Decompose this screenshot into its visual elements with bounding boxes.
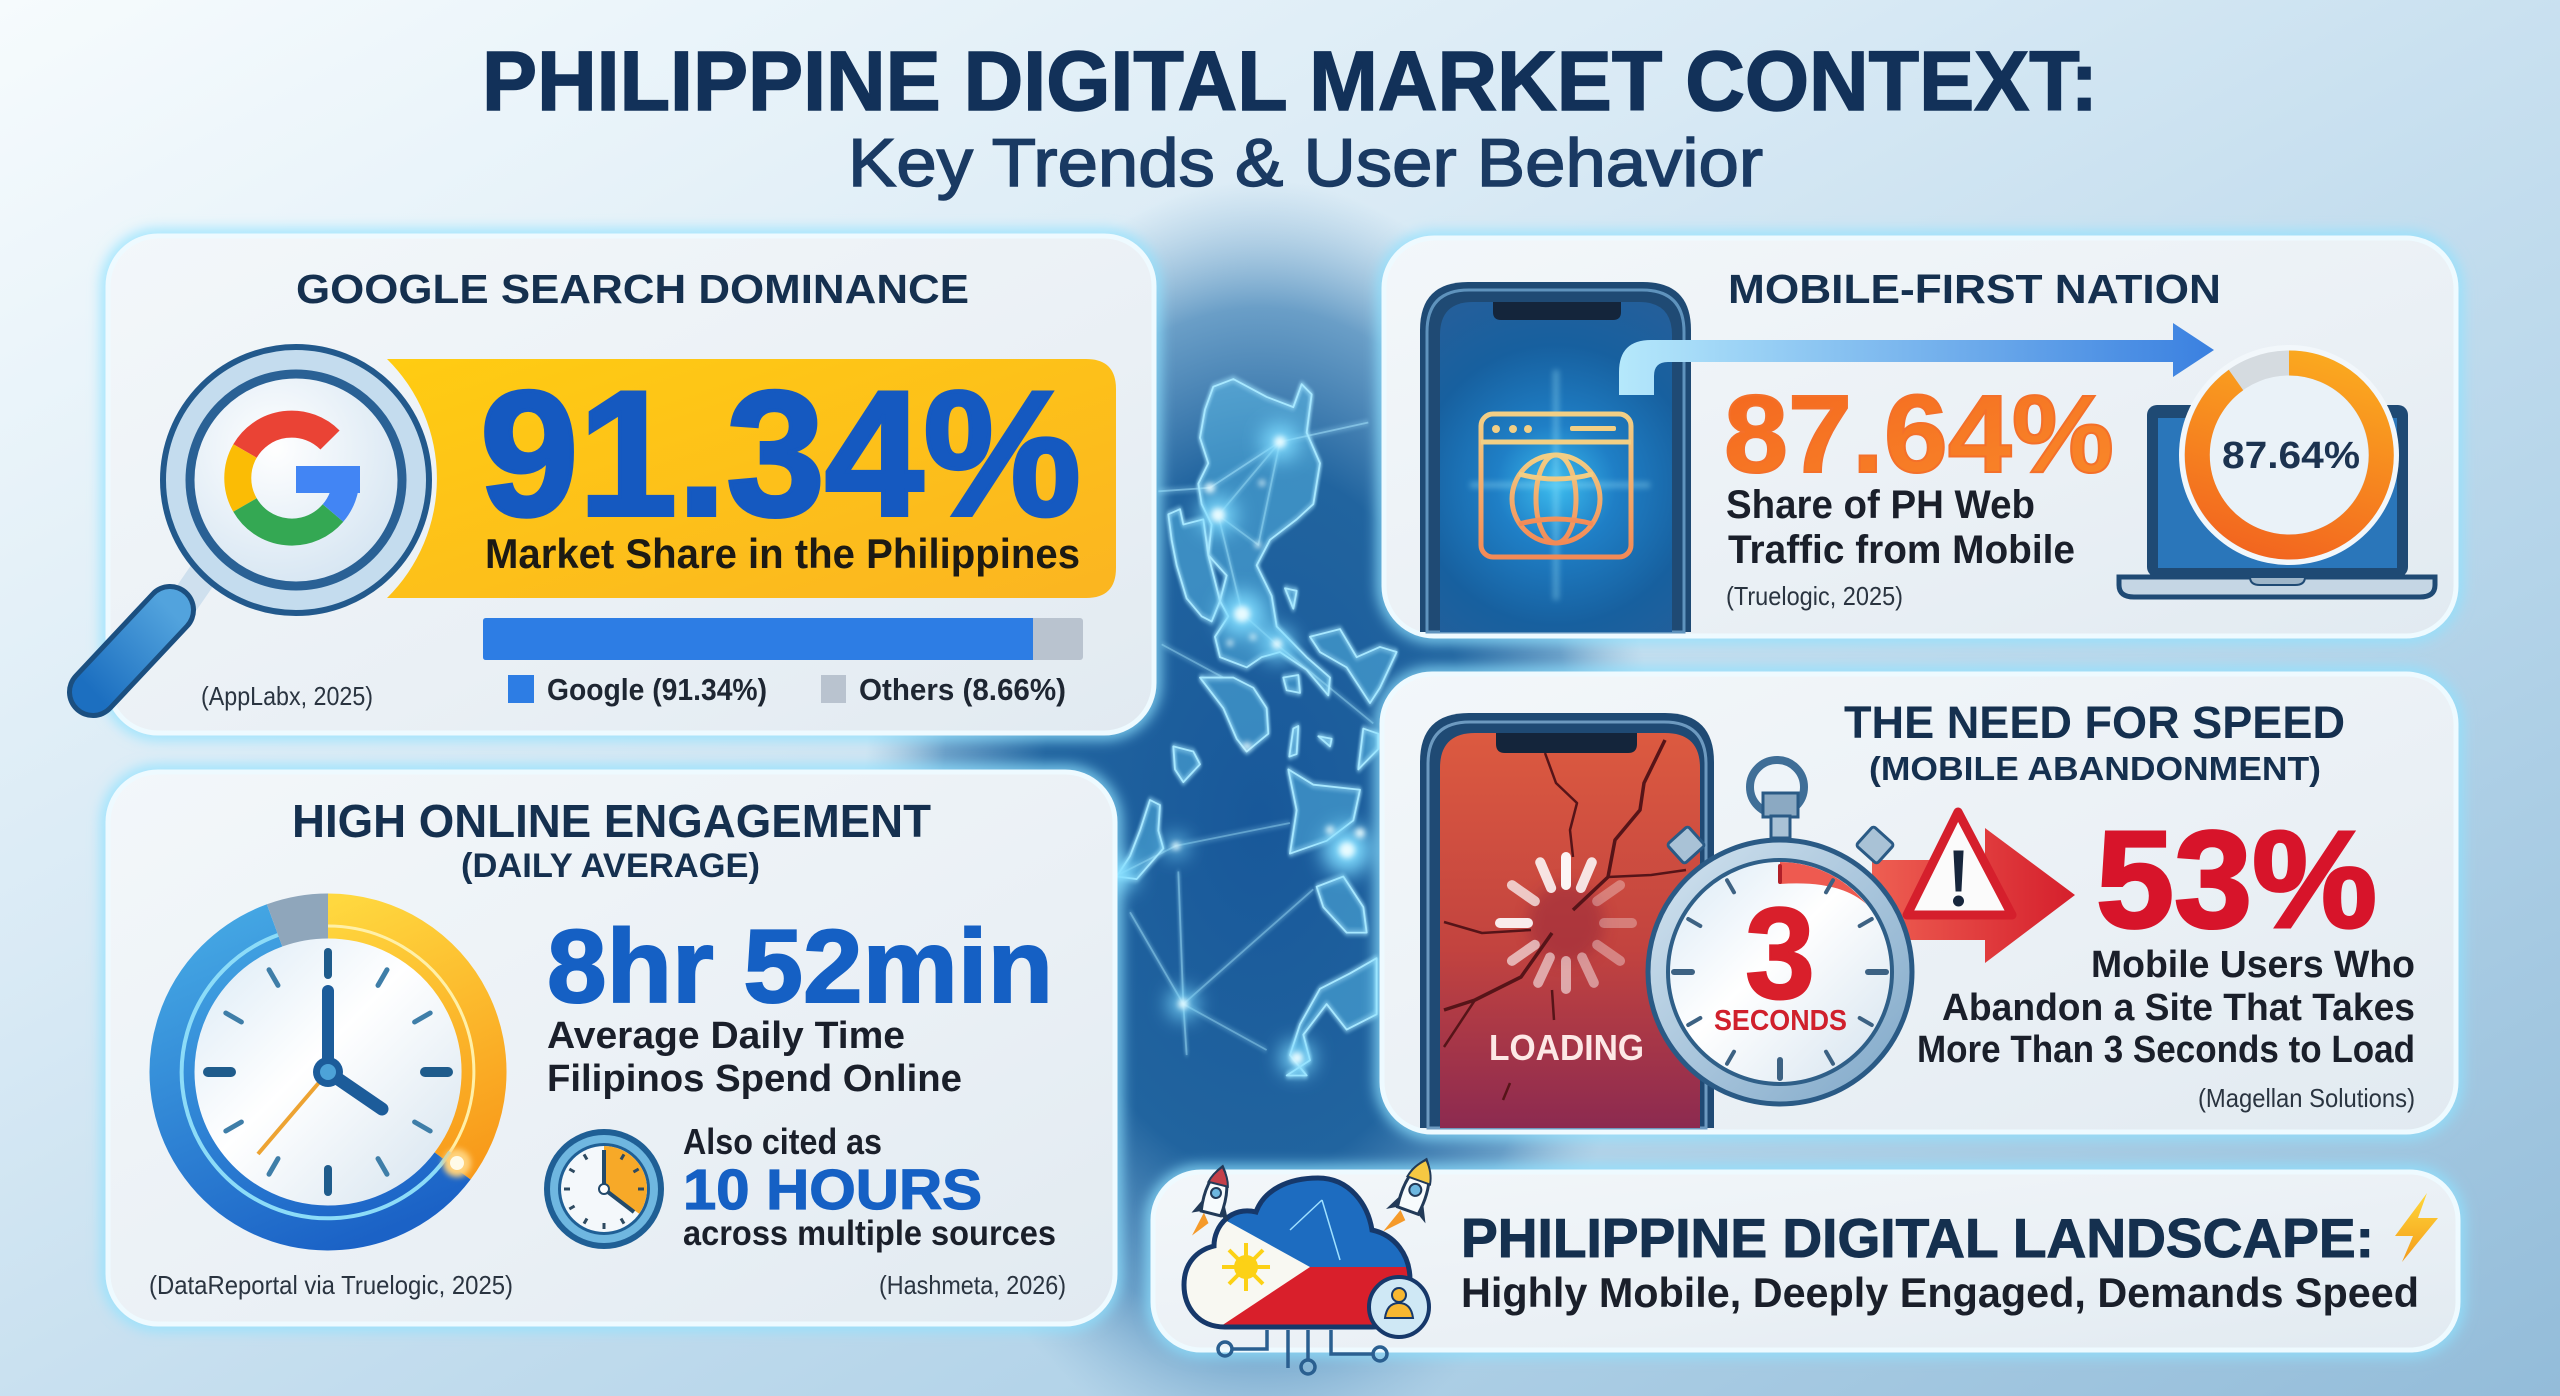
icon: phone with browser globe bbox=[1420, 282, 1691, 632]
description: Average Daily Time bbox=[547, 1015, 905, 1057]
description: Share of PH Web bbox=[1726, 483, 2035, 527]
source: (AppLabx, 2025) bbox=[201, 681, 373, 711]
stopwatch unit: SECONDS bbox=[1714, 1005, 1847, 1037]
panel: Google search dominance bbox=[93, 236, 1154, 733]
stopwatch figure: 3 bbox=[1745, 880, 1815, 1026]
legend: Others: Others (8.66%) bbox=[859, 672, 1066, 707]
big time figure: 8hr 52min bbox=[547, 909, 1053, 1025]
donut chart bbox=[2179, 345, 2399, 565]
icon: stopwatch 3 seconds bbox=[1648, 760, 1912, 1104]
icon: lightning bolt bbox=[2395, 1193, 2438, 1262]
icon: people badge bbox=[1369, 1277, 1429, 1337]
glowing Philippines network map bbox=[1104, 379, 1397, 1076]
also cited text: Also cited as bbox=[683, 1121, 882, 1162]
arrow: phone to laptop bbox=[1619, 323, 2214, 395]
icon: laptop bbox=[2119, 405, 2435, 597]
sub heading: (DAILY AVERAGE) bbox=[461, 847, 760, 885]
description: Abandon a Site That Takes bbox=[1942, 987, 2415, 1029]
source: Hashmeta: (Hashmeta, 2026) bbox=[879, 1270, 1066, 1300]
description bbox=[547, 1015, 962, 1100]
panel: Philippine digital landscape summary bbox=[1153, 1153, 2458, 1374]
description: Filipinos Spend Online bbox=[547, 1058, 962, 1100]
main title: PHILIPPINE DIGITAL MARKET CONTEXT: bbox=[482, 34, 2098, 128]
also cited text bbox=[683, 1121, 1056, 1253]
icon: small clock bbox=[544, 1129, 664, 1249]
sub heading: (MOBILE ABANDONMENT) bbox=[1869, 750, 2321, 787]
subtitle: Key Trends & User Behavior bbox=[848, 125, 1763, 201]
icon: cloud with Philippine flag bbox=[1182, 1176, 1412, 1330]
heading: MOBILE-FIRST NATION bbox=[1728, 266, 2221, 312]
icon: magnifying glass with Google G bbox=[93, 347, 429, 692]
heading: HIGH ONLINE ENGAGEMENT bbox=[292, 795, 931, 847]
source: DataReportal: (DataReportal via Truelogic, 2025) bbox=[149, 1270, 513, 1300]
source: (Truelogic, 2025) bbox=[1726, 581, 1903, 611]
legend: Google: Google (91.34%) bbox=[547, 672, 767, 707]
share bar bbox=[483, 618, 1083, 660]
main title bbox=[482, 34, 2098, 201]
panel: mobile-first nation bbox=[1384, 238, 2456, 636]
also cited text: across multiple sources bbox=[683, 1214, 1056, 1253]
description bbox=[1726, 483, 2075, 572]
big number: 91.34% bbox=[480, 354, 1081, 553]
heading: PHILIPPINE DIGITAL LANDSCAPE: bbox=[1461, 1207, 2374, 1269]
big number: 53% bbox=[2096, 803, 2377, 957]
description: Traffic from Mobile bbox=[1728, 528, 2075, 572]
icon: cracked phone loading bbox=[1420, 713, 1714, 1128]
icon: left rocket bbox=[1186, 1162, 1241, 1243]
panel: the need for speed bbox=[1382, 674, 2456, 1132]
heading: THE NEED FOR SPEED bbox=[1844, 697, 2345, 748]
also cited text: 10 HOURS bbox=[683, 1158, 982, 1222]
description bbox=[1917, 944, 2415, 1071]
donut value: 87.64% bbox=[2222, 435, 2360, 477]
description: Mobile Users Who bbox=[2091, 944, 2415, 986]
tagline: Highly Mobile, Deeply Engaged, Demands Speed bbox=[1461, 1269, 2419, 1316]
banner caption: Market Share in the Philippines bbox=[485, 530, 1080, 577]
heading: GOOGLE SEARCH DOMINANCE bbox=[296, 266, 969, 312]
arrow with warning triangle bbox=[1872, 812, 2075, 963]
yellow market share banner bbox=[387, 359, 1116, 598]
source: (Magellan Solutions) bbox=[2198, 1083, 2415, 1113]
panel: high online engagement bbox=[108, 772, 1115, 1324]
big number: 87.64% bbox=[1724, 373, 2114, 496]
loading label: LOADING bbox=[1489, 1027, 1644, 1068]
icon: right rocket bbox=[1378, 1153, 1446, 1244]
description: More Than 3 Seconds to Load bbox=[1917, 1029, 2415, 1071]
icon: large clock with ring bbox=[172, 916, 484, 1228]
icon: circuit lines bbox=[1218, 1330, 1387, 1374]
